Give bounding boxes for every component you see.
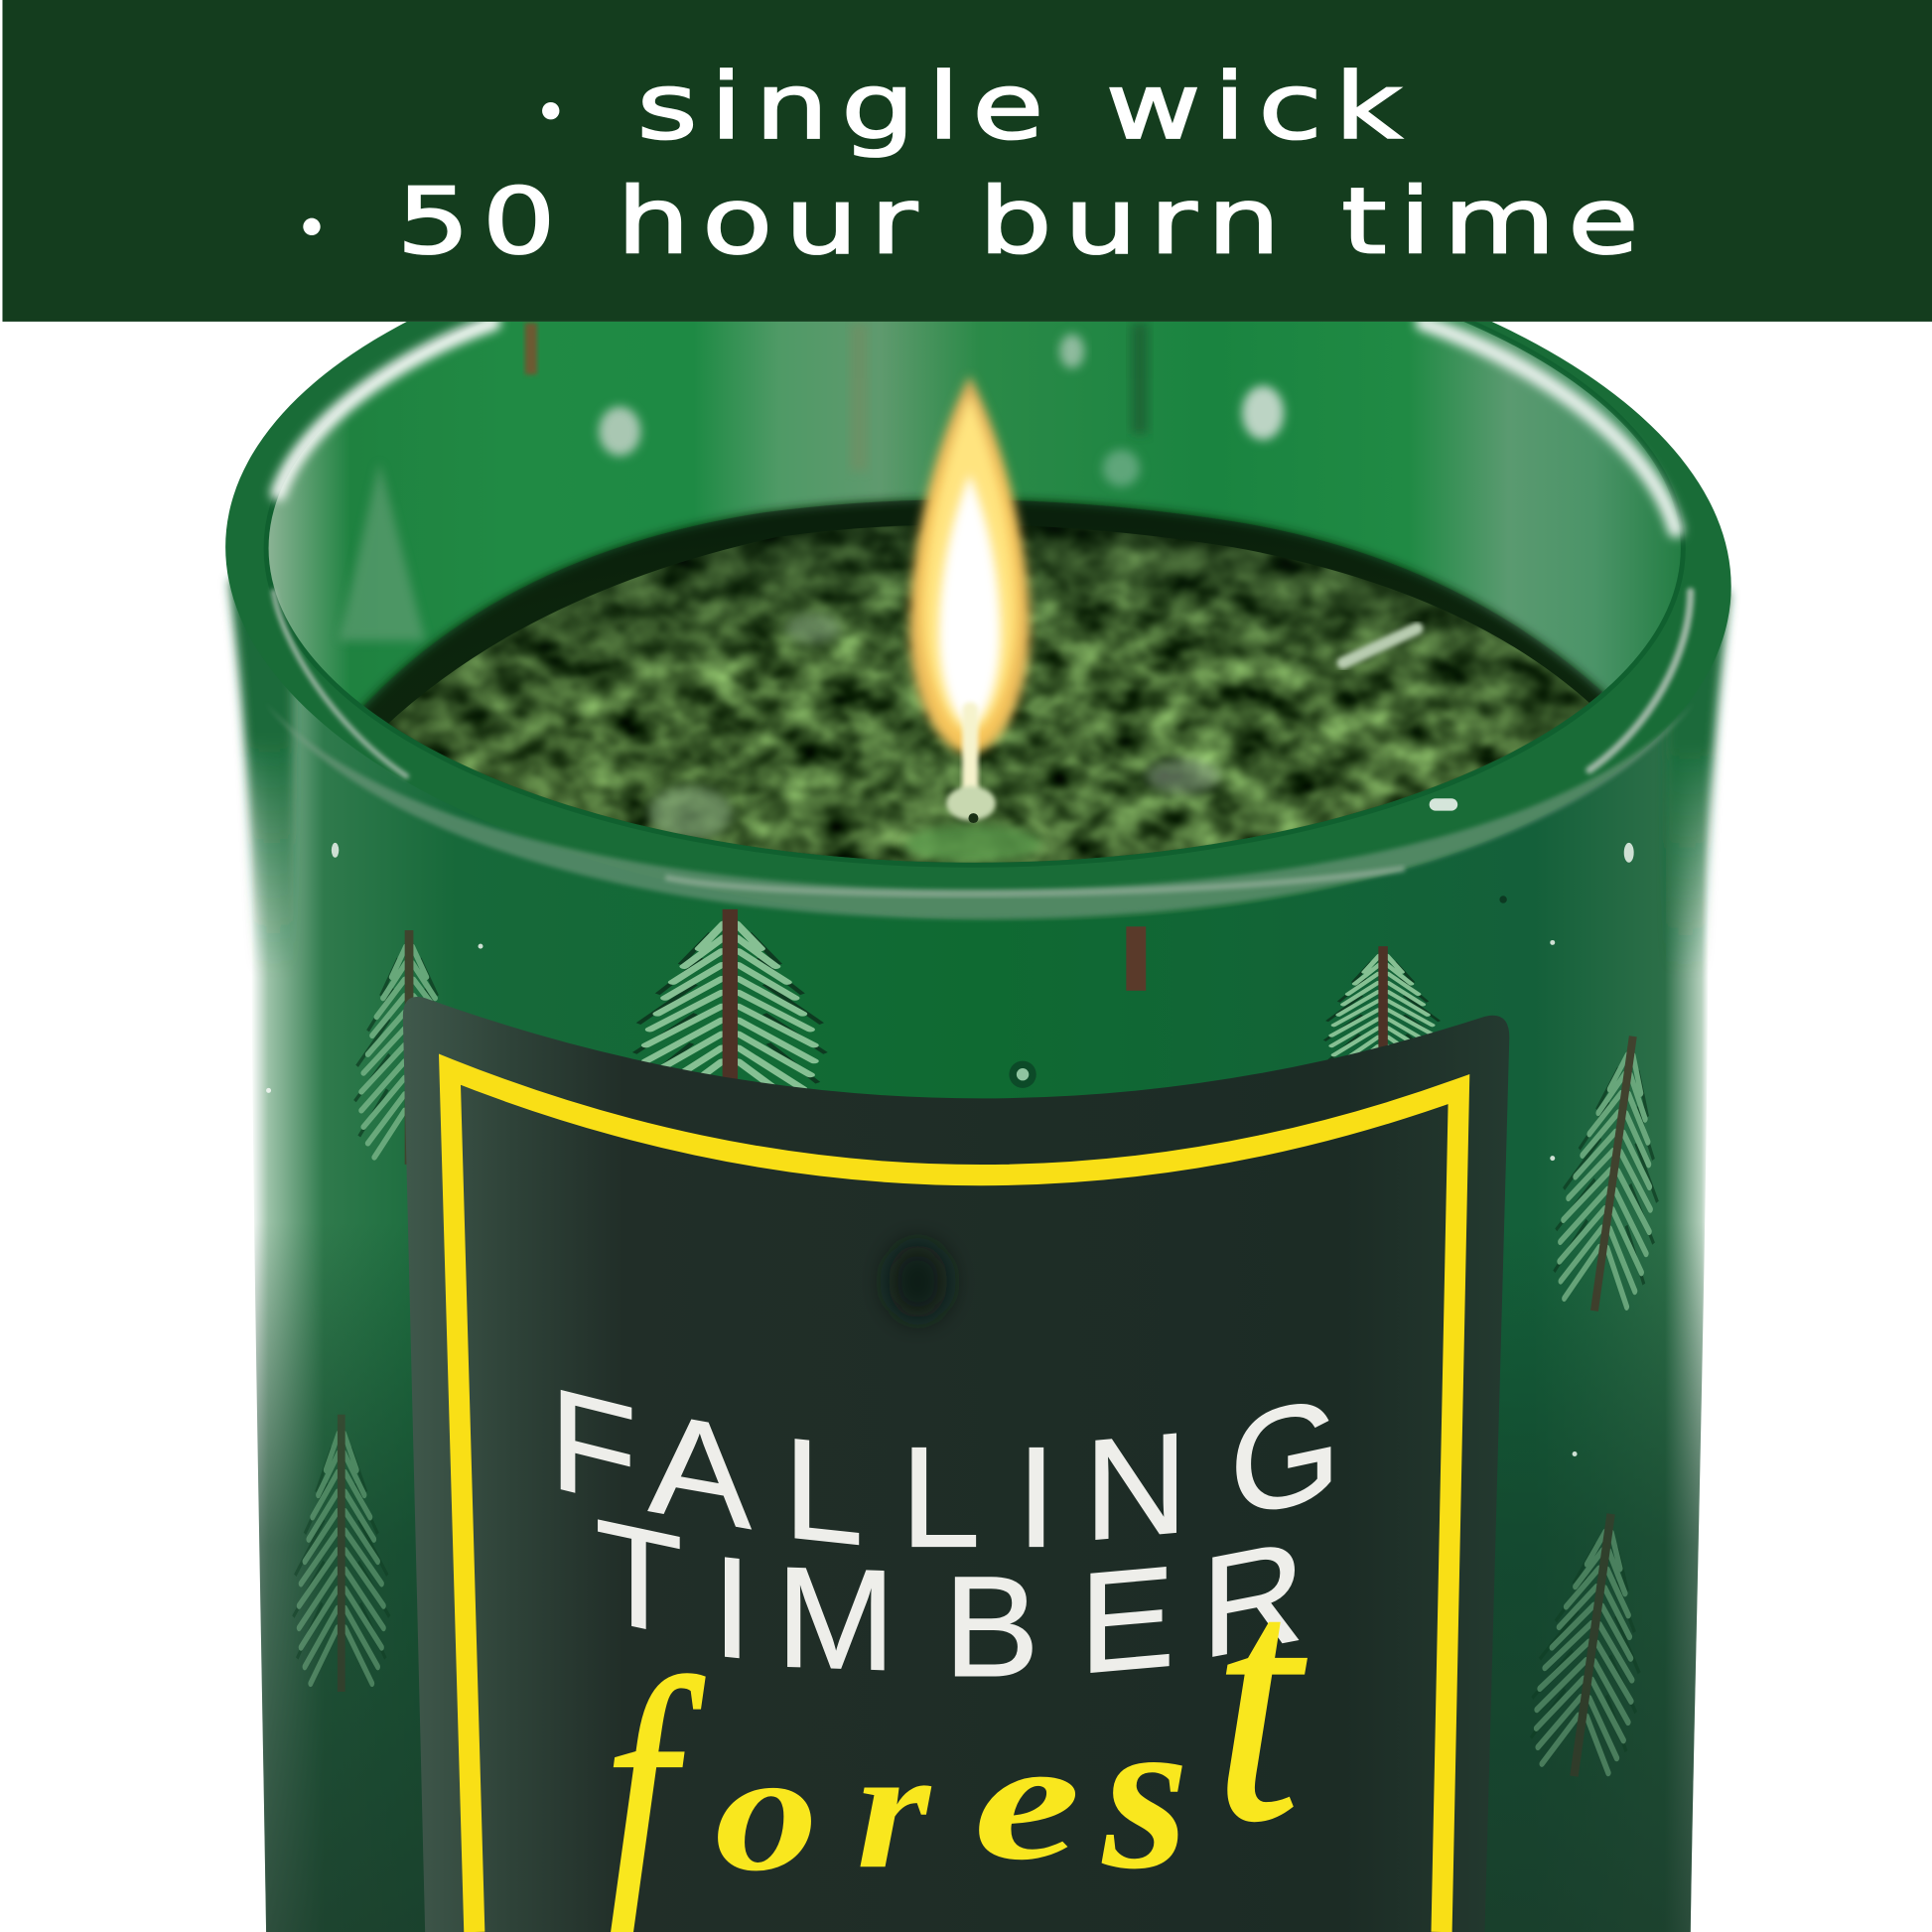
label heading: FALLING: A	[648, 1382, 752, 1560]
feature: single wick: single wick	[637, 54, 1415, 160]
label script: forest: t	[1213, 1509, 1311, 1892]
product label	[403, 997, 1509, 1932]
jar body	[229, 579, 1729, 1932]
label heading: TIMBER: B	[944, 1547, 1039, 1707]
label heading: FALLING	[560, 1390, 1330, 1547]
label heading: FALLING: L	[783, 1407, 863, 1576]
label script: forest: e	[973, 1705, 1080, 1895]
printed pine trees	[266, 843, 1682, 1783]
feature: 50 hour burn time: 50 hour burn time	[397, 168, 1651, 274]
label heading: TIMBER: I	[712, 1525, 752, 1690]
label heading: TIMBER: T	[595, 1488, 682, 1667]
label script: forest: s	[1101, 1670, 1189, 1915]
interior reflections and snow	[339, 323, 1284, 640]
label heading: TIMBER: M	[776, 1537, 896, 1701]
label heading: TIMBER: E	[1079, 1535, 1174, 1704]
label heading: FALLING: F	[550, 1357, 636, 1538]
label script: forest: r	[857, 1713, 932, 1904]
top banner	[2, 0, 1932, 322]
label heading: FALLING: L	[900, 1418, 980, 1578]
label script: forest: o	[715, 1716, 818, 1907]
label heading: FALLING: G	[1230, 1365, 1341, 1549]
label heading: TIMBER: R	[1201, 1509, 1305, 1689]
glass rim	[225, 322, 1731, 921]
wax surface	[345, 499, 1639, 888]
label heading: FALLING: N	[1084, 1401, 1187, 1571]
candle flame	[909, 376, 1031, 823]
label heading: FALLING: I	[1017, 1418, 1056, 1578]
yellow frame	[450, 1069, 1458, 1932]
label script: forest	[611, 1622, 1308, 1932]
jar interior	[268, 322, 1681, 863]
feature: single wick	[542, 54, 1415, 160]
candle jar	[225, 194, 1731, 1932]
rim highlights	[274, 323, 1691, 804]
label heading: TIMBER	[598, 1519, 1299, 1676]
wick	[946, 702, 996, 823]
